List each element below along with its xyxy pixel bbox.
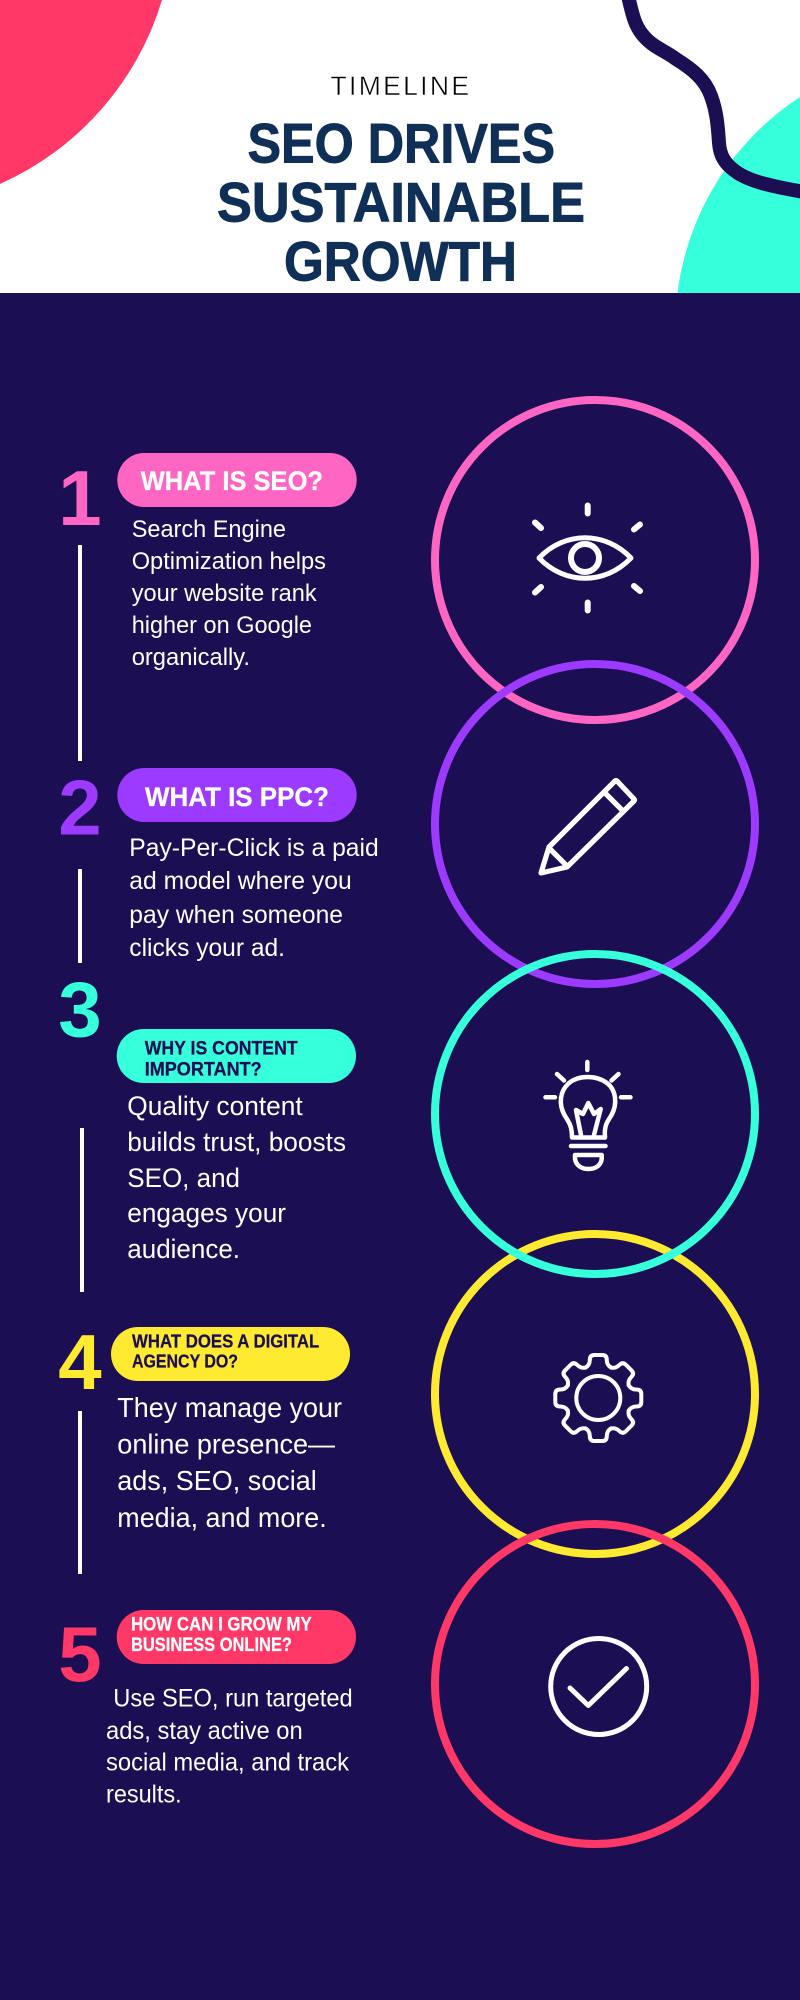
number 3: 3 bbox=[58, 966, 102, 1054]
title: SEO DRIVES bbox=[248, 112, 555, 174]
body text 5: social media, and track bbox=[106, 1749, 349, 1777]
body text 4 bbox=[117, 1392, 342, 1533]
decorative coral circle bbox=[0, 0, 162, 184]
body text 1: organically. bbox=[132, 644, 250, 671]
heading pill 2 bbox=[117, 768, 357, 822]
heading pill 5 bbox=[117, 1610, 356, 1664]
circle: yellow bbox=[435, 1234, 755, 1554]
body text 3: SEO, and bbox=[127, 1163, 240, 1193]
body text 2: pay when someone bbox=[129, 901, 343, 929]
timeline segment 1 bbox=[78, 545, 82, 761]
body text 1: Search Engine bbox=[132, 516, 286, 543]
number 4: 4 bbox=[58, 1318, 102, 1406]
step 4 bbox=[58, 1318, 350, 1574]
icon: gear bbox=[555, 1355, 641, 1441]
heading pill 5: BUSINESS ONLINE? bbox=[131, 1635, 292, 1656]
circle: teal bbox=[435, 954, 755, 1274]
heading pill 1: WHAT IS SEO? bbox=[141, 466, 323, 496]
body text 2: ad model where you bbox=[129, 867, 352, 895]
heading pill 4 bbox=[111, 1327, 350, 1381]
circle: purple bbox=[435, 664, 755, 984]
heading pill 2: WHAT IS PPC? bbox=[145, 782, 329, 812]
body text 4: media, and more. bbox=[117, 1502, 327, 1533]
body text 4: ads, SEO, social bbox=[117, 1465, 317, 1496]
body text 3: audience. bbox=[127, 1234, 240, 1264]
body text 2 bbox=[129, 834, 379, 962]
title bbox=[217, 112, 585, 292]
body text 1: your website rank bbox=[132, 580, 318, 607]
timeline segment 4 bbox=[78, 1411, 82, 1574]
title: SUSTAINABLE bbox=[217, 170, 585, 234]
number 1: 1 bbox=[58, 454, 102, 542]
body text 5: Use SEO, run targeted bbox=[113, 1685, 353, 1713]
circle: coral bbox=[435, 1524, 755, 1844]
timeline segment 2 bbox=[78, 869, 82, 963]
icon: eye bbox=[535, 506, 640, 610]
step 3 bbox=[58, 966, 356, 1292]
step 2 bbox=[58, 764, 379, 963]
heading pill 3 bbox=[117, 1029, 356, 1083]
timeline segment 3 bbox=[80, 1128, 84, 1292]
eyebrow: TIMELINE: TIMELINE bbox=[330, 71, 469, 101]
body text 3: engages your bbox=[127, 1198, 286, 1228]
body text 4: online presence— bbox=[117, 1429, 335, 1460]
body text 1: higher on Google bbox=[132, 612, 312, 639]
number 2: 2 bbox=[58, 764, 102, 852]
heading pill 4: AGENCY DO? bbox=[132, 1352, 238, 1372]
number 5: 5 bbox=[58, 1610, 102, 1698]
circle: pink bbox=[435, 400, 755, 720]
heading pill 5: HOW CAN I GROW MY bbox=[131, 1614, 312, 1636]
body text 3: builds trust, boosts bbox=[127, 1127, 346, 1157]
icon: pencil bbox=[541, 780, 634, 873]
body text 3: Quality content bbox=[127, 1091, 303, 1121]
body text 5 bbox=[106, 1685, 353, 1809]
body text 1 bbox=[132, 516, 326, 671]
decorative teal circle bbox=[678, 97, 800, 293]
icon: check mark in circle bbox=[551, 1638, 647, 1734]
heading pill 3: IMPORTANT? bbox=[145, 1060, 262, 1080]
body text 5: ads, stay active on bbox=[106, 1717, 303, 1745]
step 5 bbox=[58, 1610, 356, 1809]
heading pill 4: WHAT DOES A DIGITAL bbox=[132, 1332, 319, 1352]
body text 2: clicks your ad. bbox=[129, 934, 285, 962]
decorative squiggle bbox=[628, 0, 800, 192]
heading pill 1 bbox=[117, 453, 357, 507]
step 1 bbox=[58, 453, 357, 761]
body text 2: Pay-Per-Click is a paid bbox=[129, 834, 379, 862]
icon: light bulb bbox=[546, 1062, 630, 1169]
body text 5: results. bbox=[106, 1781, 182, 1809]
body text 4: They manage your bbox=[117, 1392, 342, 1423]
body text 1: Optimization helps bbox=[132, 548, 326, 575]
header panel bbox=[0, 0, 800, 293]
heading pill 3: WHY IS CONTENT bbox=[145, 1038, 298, 1060]
title: GROWTH bbox=[284, 230, 517, 292]
body text 3 bbox=[127, 1091, 346, 1264]
